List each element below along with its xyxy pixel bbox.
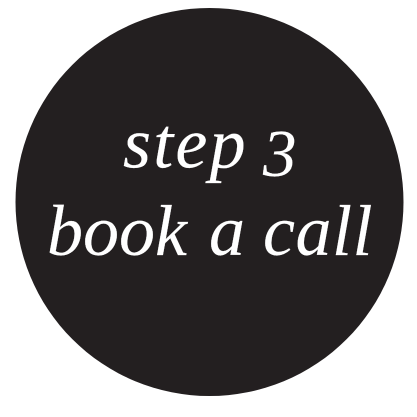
heading: step 3: 3 — [262, 117, 296, 191]
heading: book a call: book — [47, 191, 189, 271]
heading: book a call: a — [209, 191, 245, 271]
heading: book a call: call — [263, 191, 373, 271]
heading: step 3: step — [123, 104, 248, 184]
